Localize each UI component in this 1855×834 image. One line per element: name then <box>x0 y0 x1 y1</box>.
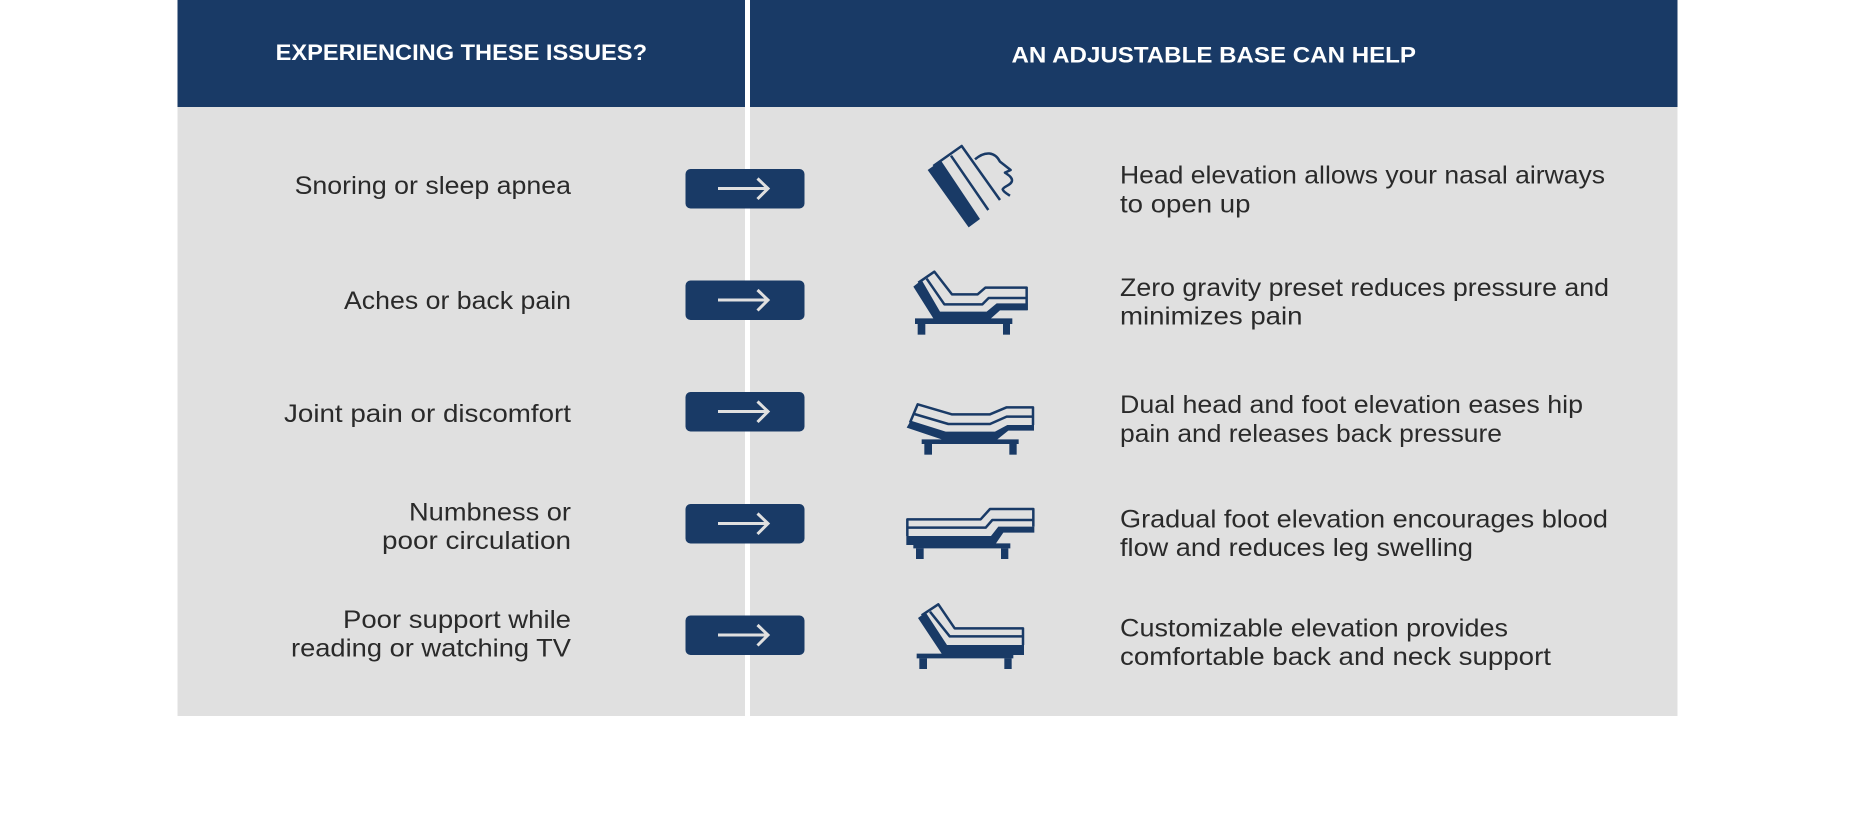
row 3: benefit <box>1120 391 1583 448</box>
icon: foot elevation bed <box>906 509 1034 559</box>
row 4: issue: poor circulation <box>382 527 571 555</box>
row 5: issue: Poor support while <box>343 606 571 634</box>
heading: issues: EXPERIENCING THESE ISSUES? <box>276 40 647 65</box>
row 4: benefit: flow and reduces leg swelling <box>1120 534 1473 562</box>
row 1: benefit: to open up <box>1120 191 1250 219</box>
row 5: issue: reading or watching TV <box>291 635 571 663</box>
row 4: benefit: Gradual foot elevation encourages blood <box>1120 506 1608 534</box>
row 5: benefit: Customizable elevation provides <box>1120 614 1508 642</box>
row 5: issue <box>291 606 571 663</box>
row 3: benefit: pain and releases back pressure <box>1120 420 1502 448</box>
row 3: arrow <box>686 392 804 432</box>
row 4: issue <box>382 498 571 555</box>
row 1: benefit <box>1120 161 1605 219</box>
icon: dual elevation bed <box>907 404 1034 455</box>
row 5: benefit: comfortable back and neck support <box>1120 643 1551 671</box>
row 2: benefit: Zero gravity preset reduces pressure and <box>1120 274 1609 302</box>
row 4: issue: Numbness or <box>409 498 571 526</box>
header bar: issues <box>178 0 745 107</box>
header bar: solutions <box>750 0 1678 107</box>
icon: zero gravity bed <box>913 272 1028 335</box>
row 5: benefit <box>1120 614 1551 671</box>
heading: solutions: AN ADJUSTABLE BASE CAN HELP <box>1012 42 1416 68</box>
row 3: issue: Joint pain or discomfort <box>284 400 571 428</box>
row 4: arrow <box>686 504 804 544</box>
icon: upright head bed <box>917 604 1024 669</box>
table background <box>178 0 1678 716</box>
row 2: benefit: minimizes pain <box>1120 303 1302 331</box>
row 2: issue: Aches or back pain <box>344 287 571 315</box>
row 4: benefit <box>1120 506 1608 562</box>
row 2: benefit <box>1120 274 1609 331</box>
row 1: arrow <box>686 169 804 208</box>
row 1: benefit: Head elevation allows your nasal airways <box>1120 161 1605 189</box>
row 3: benefit: Dual head and foot elevation eases hip <box>1120 391 1583 419</box>
row 1: issue: Snoring or sleep apnea <box>295 172 571 200</box>
icon: head elevation with face <box>928 146 1012 227</box>
row 5: arrow <box>686 616 804 655</box>
row 2: arrow <box>686 280 804 320</box>
